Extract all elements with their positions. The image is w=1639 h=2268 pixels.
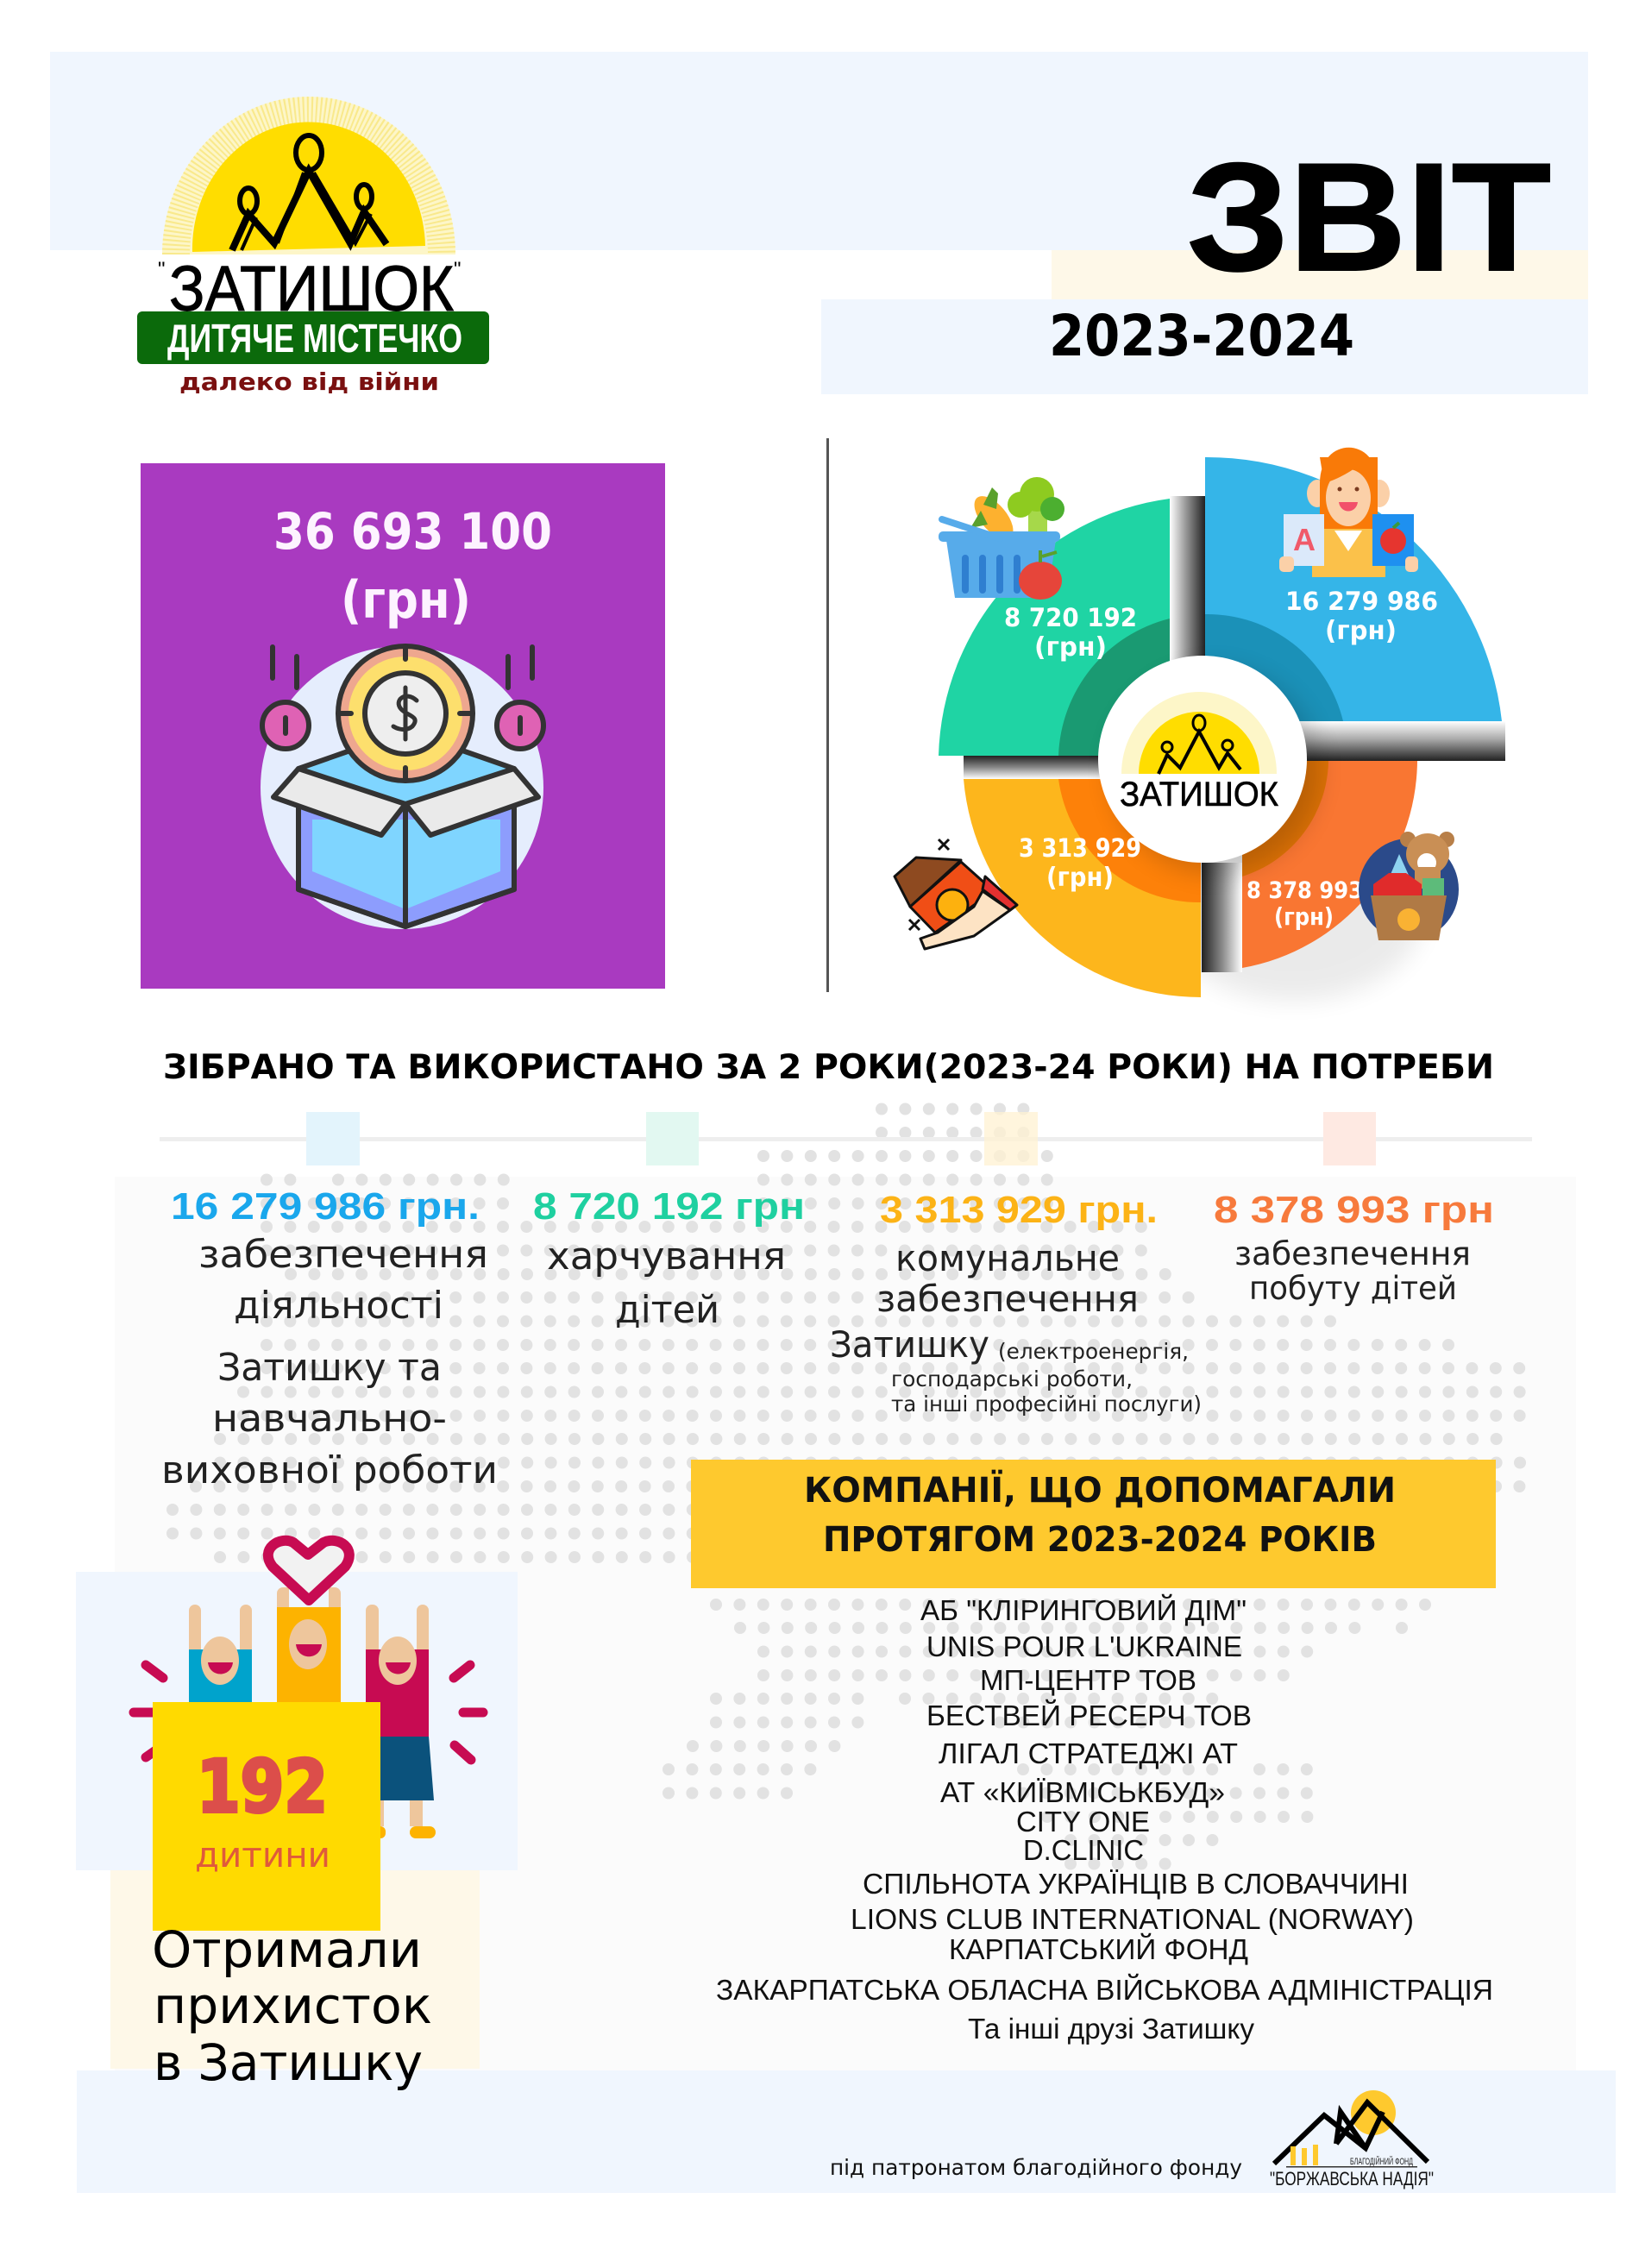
text: activity support: Затишку та — [217, 1346, 442, 1390]
timeline with category markers — [160, 1112, 1532, 1165]
list of companies: ЛІГАЛ СТРАТЕДЖІ АТ — [939, 1737, 1238, 1769]
footer band — [77, 2070, 1616, 2193]
list of companies: ЗАКАРПАТСЬКА ОБЛАСНА ВІЙСЬКОВА АДМІНІСТРАЦІЯ — [716, 1974, 1493, 2006]
logo: Borzhavska Nadiia fund: "БОРЖАВСЬКА НАДІЯ" — [1270, 2168, 1434, 2189]
chart labels: (грн) — [1034, 632, 1107, 663]
header background bands — [50, 52, 1588, 394]
chart labels: (грн) — [1046, 863, 1114, 893]
total amount text: 36 693 100 — [273, 502, 552, 561]
text: household: побуту дітей — [1249, 1270, 1457, 1307]
logo: Zatyshok children's town: " — [158, 258, 166, 281]
text: activity support: забезпечення — [198, 1233, 488, 1277]
logo: Zatyshok children's town: ДИТЯЧЕ МІСТЕЧКО — [167, 316, 462, 361]
icon: teacher: A — [1293, 522, 1316, 557]
text: utilities: та інші професійні послуги) — [891, 1392, 1202, 1417]
total amount text: (грн) — [341, 570, 471, 631]
panel heading: companies: ПРОТЯГОМ 2023-2024 РОКІВ — [823, 1520, 1377, 1560]
panel heading: companies: КОМПАНІЇ, ЩО ДОПОМАГАЛИ — [804, 1469, 1396, 1511]
list of companies: КАРПАТСЬКИЙ ФОНД — [949, 1933, 1248, 1965]
text: household: забезпечення — [1234, 1235, 1471, 1272]
text: utilities — [830, 1189, 1202, 1417]
total amount text — [273, 502, 552, 631]
panel: pale background — [115, 1177, 1576, 2070]
dotted world map background — [173, 1109, 1523, 1863]
text: utilities: (електроенергія, — [998, 1339, 1189, 1364]
icon: toy box — [1359, 832, 1459, 940]
segment: utilities — [964, 779, 1201, 997]
list of companies: UNIS POUR L'UKRAINE — [926, 1630, 1242, 1662]
text: utilities: забезпечення — [876, 1278, 1139, 1320]
chart labels: 8 720 192 — [1004, 603, 1137, 632]
chart labels: 8 378 993 — [1247, 877, 1363, 904]
text: activity support: 16 279 986 грн. — [171, 1185, 480, 1228]
text: activity support: навчально- — [212, 1397, 447, 1441]
logo: Borzhavska Nadiia fund: БЛАГОДІЙНИЙ ФОНД — [1350, 2156, 1413, 2167]
chart centre logo: ЗАТИШОК — [1120, 776, 1279, 814]
text: nutrition: 8 720 192 грн — [533, 1185, 805, 1228]
segment: household — [1242, 761, 1417, 968]
counter: 192 children: дитини — [195, 1836, 330, 1875]
icon: coin dropping into a box — [261, 646, 543, 929]
list of companies: МП-ЦЕНТР ТОВ — [980, 1664, 1196, 1696]
segment: activity support — [1205, 457, 1502, 721]
chart labels — [1004, 587, 1438, 931]
list of companies: CITY ONE — [1016, 1806, 1150, 1838]
icon: food basket — [939, 477, 1064, 600]
divider — [826, 438, 829, 992]
report years: 2023-2024 — [1049, 303, 1354, 369]
list of companies: АТ «КИЇВМІСЬКБУД» — [940, 1776, 1225, 1808]
panel: total amount — [141, 463, 665, 989]
chart: expense pie — [895, 448, 1505, 1001]
panel heading: companies — [691, 1460, 1496, 1588]
text: utilities: 3 313 929 грн. — [880, 1189, 1158, 1231]
list of companies: LIONS CLUB INTERNATIONAL (NORWAY) — [851, 1903, 1414, 1935]
text: nutrition: харчування — [547, 1235, 786, 1278]
text: activity support: діяльності — [234, 1284, 443, 1328]
text: nutrition — [533, 1185, 805, 1332]
text: utilities: господарські роботи, — [891, 1366, 1133, 1392]
logo: Zatyshok children's town — [137, 97, 489, 396]
text: received shelter: прихисток — [154, 1976, 432, 2035]
title: ЗВІТ — [1187, 131, 1551, 303]
list of companies: D.CLINIC — [1023, 1834, 1144, 1866]
counter: 192 children — [153, 1702, 380, 1931]
chart dividers — [964, 496, 1505, 972]
list of companies: АБ "КЛІРИНГОВИЙ ДІМ" — [920, 1594, 1247, 1626]
text: received shelter — [152, 1920, 432, 2092]
list of companies: БЕСТВЕЙ РЕСЕРЧ ТОВ — [926, 1699, 1252, 1731]
logo: Zatyshok children's town: ЗАТИШОК — [169, 253, 454, 324]
chart labels: 16 279 986 — [1285, 587, 1438, 616]
text: received shelter: Отримали — [152, 1920, 422, 1979]
text: household: 8 378 993 грн — [1214, 1189, 1494, 1231]
logo: Borzhavska Nadiia fund — [1270, 2090, 1434, 2189]
text: received shelter: в Затишку — [154, 2033, 423, 2092]
footer patronage text: під патронатом благодійного фонду — [830, 2155, 1242, 2180]
counter: 192 children: 192 — [197, 1744, 328, 1829]
text: activity support — [161, 1185, 498, 1492]
segment: nutrition — [939, 499, 1170, 756]
logo: Zatyshok children's town: " — [454, 258, 462, 281]
text: nutrition: дітей — [615, 1288, 719, 1332]
list of companies: СПІЛЬНОТА УКРАЇНЦІВ В СЛОВАЧЧИНІ — [863, 1868, 1409, 1900]
list of companies: Та інші друзі Затишку — [968, 2013, 1254, 2045]
list of companies — [716, 1594, 1493, 2045]
heading: collected and spent: ЗІБРАНО ТА ВИКОРИСТАНО ЗА 2 РОКИ(2023-24 РОКИ) НА ПОТРЕБИ — [163, 1048, 1494, 1087]
icon: house in hand — [895, 839, 1017, 949]
logo: Zatyshok children's town: далеко від війни — [179, 368, 439, 396]
chart labels: (грн) — [1325, 616, 1397, 646]
text: activity support: виховної роботи — [161, 1448, 498, 1492]
chart centre logo — [1098, 656, 1320, 874]
panel: children sheltered — [76, 1541, 518, 2069]
text: utilities: комунальне — [895, 1237, 1120, 1279]
chart labels: (грн) — [1274, 902, 1334, 931]
text: utilities: Затишку — [830, 1323, 989, 1366]
icon: happy children with heart — [134, 1541, 483, 1838]
icon: teacher — [1279, 448, 1418, 577]
chart labels: 3 313 929 — [1019, 833, 1141, 863]
text: household — [1214, 1189, 1494, 1307]
